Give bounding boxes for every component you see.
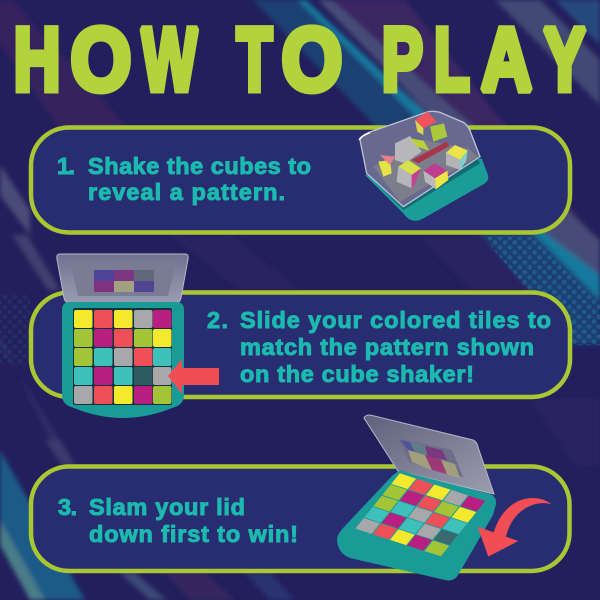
text: step 2: [207, 307, 551, 387]
title: H: [14, 9, 60, 109]
title: O: [282, 9, 342, 109]
tiles: [355, 473, 485, 556]
icon: board with closing lid: [337, 415, 496, 580]
arrow: lid slam curved: [478, 498, 552, 557]
title: L: [434, 9, 470, 109]
title: T: [237, 9, 272, 109]
lid: [364, 415, 494, 494]
icon: open game board: [57, 254, 188, 418]
board body: [337, 471, 496, 580]
lid: [57, 254, 188, 303]
icon: cube shaker: [359, 111, 488, 221]
text: step 2: on the cube shaker!: [240, 361, 474, 387]
text: step 3: down first to win!: [89, 521, 298, 547]
panel: step 1: [31, 128, 570, 232]
text: step 2: match the pattern shown: [240, 334, 534, 360]
text: step 1: reveal a pattern.: [88, 179, 285, 205]
board body: [62, 302, 184, 418]
tiles: [74, 310, 172, 404]
panel: step 3: [31, 466, 570, 571]
panel: step 2: [31, 292, 570, 397]
title: A: [481, 9, 532, 109]
text: step 1: Shake the cubes to: [88, 153, 311, 179]
arrow: slide left: [168, 359, 219, 394]
text: step 3: 3.: [58, 494, 77, 520]
text: step 1: 1.: [57, 153, 75, 179]
text: step 3: [58, 494, 298, 547]
text: step 2: 2.: [207, 307, 228, 333]
text: step 2: Slide your colored tiles to: [240, 307, 551, 333]
title: P: [382, 9, 423, 109]
title: [14, 9, 586, 109]
text: step 1: [57, 153, 311, 205]
title: O: [71, 9, 131, 109]
text: step 3: Slam your lid: [89, 494, 245, 520]
title: W: [142, 9, 197, 109]
